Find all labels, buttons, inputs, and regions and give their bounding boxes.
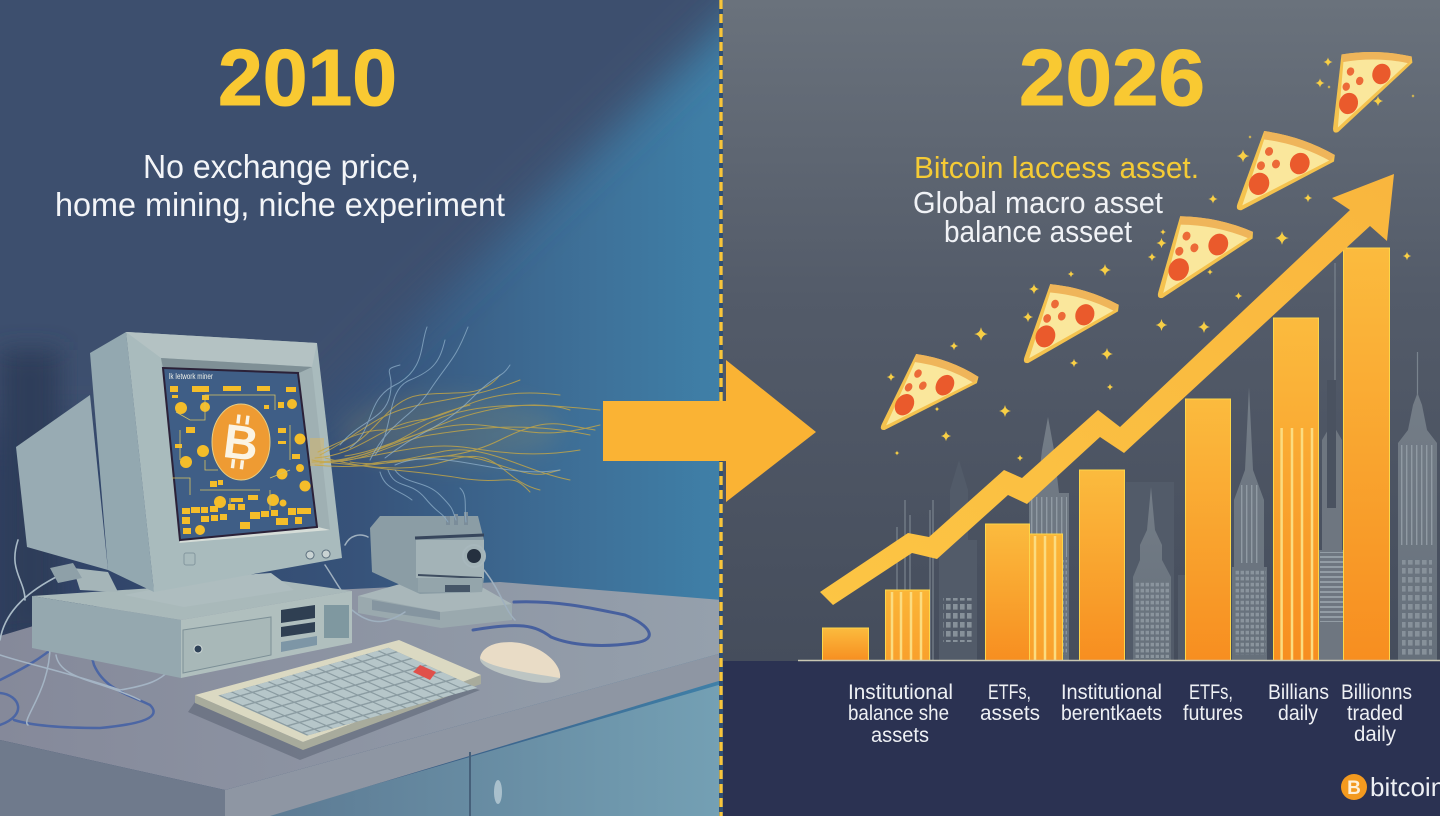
monitor back housing xyxy=(16,395,108,570)
pizza slices xyxy=(880,51,1413,452)
sparkles xyxy=(887,57,1415,461)
mouse xyxy=(480,642,560,683)
label 6: traded xyxy=(1347,702,1403,725)
pizza 2 xyxy=(1023,280,1121,383)
footer strip xyxy=(722,661,1440,816)
label 6: daily xyxy=(1354,723,1396,746)
computer xyxy=(16,332,352,678)
heading: 2010: 2010 xyxy=(218,33,397,122)
label 1: Institutional xyxy=(848,681,953,704)
text: 2026 description: balance asseet xyxy=(944,214,1132,249)
bar 3 xyxy=(986,524,1030,661)
label 4 xyxy=(1183,681,1243,725)
label 4: ETFs, xyxy=(1189,681,1233,704)
label 4: futures xyxy=(1183,702,1243,725)
pizza 1 xyxy=(880,351,981,452)
bitcoin logo: B xyxy=(1347,778,1361,799)
mining rig box xyxy=(358,512,512,628)
bar 6 xyxy=(1186,399,1230,661)
heading: 2026: 2026 xyxy=(1019,33,1205,122)
desk xyxy=(0,582,722,816)
label 1: assets xyxy=(871,724,929,747)
bar 7 xyxy=(1274,318,1318,661)
transition arrow xyxy=(603,360,816,502)
screen bitcoin coin: B xyxy=(220,415,261,472)
label 5: Billians xyxy=(1268,681,1329,704)
text: 2010 description: home mining, niche experiment xyxy=(55,186,505,223)
cables xyxy=(0,535,649,728)
wall shade upper left xyxy=(0,0,760,430)
bar 5 xyxy=(1080,470,1124,661)
pizza 5 xyxy=(1333,51,1413,135)
text: 2010 description: No exchange price, xyxy=(143,148,419,185)
monitor left bezel xyxy=(90,332,154,592)
label 5: daily xyxy=(1278,702,1318,725)
label 6: Billionns xyxy=(1341,681,1412,704)
monitor front bezel xyxy=(126,332,342,592)
screen circuit nodes xyxy=(170,386,311,535)
label 3: berentkaets xyxy=(1061,702,1162,725)
panel: 2010 home mining xyxy=(0,0,760,816)
bar 8 xyxy=(1344,248,1390,661)
screen bitcoin coin xyxy=(212,404,270,480)
bar 4 xyxy=(1030,534,1062,661)
panel: 2026 global asset xyxy=(722,0,1440,816)
label 2: ETFs, xyxy=(988,681,1031,704)
monitor stand xyxy=(50,563,294,607)
text: 2026 description: Global macro asset xyxy=(913,185,1163,220)
heat and data strands xyxy=(310,327,600,522)
pizza 4 xyxy=(1236,127,1337,234)
text: 2026 description xyxy=(913,185,1163,249)
PC base xyxy=(32,580,352,678)
label 6 xyxy=(1341,681,1412,746)
skyline xyxy=(897,263,1437,660)
monitor screen xyxy=(163,368,317,540)
keyboard xyxy=(188,640,481,760)
bar chart xyxy=(822,248,1390,661)
pizza 3 xyxy=(1157,213,1255,313)
label 1: balance she xyxy=(848,702,949,725)
label 5 xyxy=(1268,681,1329,725)
label 3: Institutional xyxy=(1061,681,1162,704)
bar 2 xyxy=(886,590,930,661)
divider xyxy=(719,0,723,816)
trend arrow xyxy=(820,174,1394,605)
text: 2026 highlight: Bitcoin laccess asset. xyxy=(914,150,1199,185)
label 2 xyxy=(980,681,1040,725)
label 3 xyxy=(1061,681,1162,725)
label 1 xyxy=(848,681,953,747)
bar labels xyxy=(848,681,1412,747)
screen title: lk Ietwork miner xyxy=(169,372,213,381)
bar 1 xyxy=(822,628,868,661)
text: 2010 description xyxy=(55,148,505,223)
label 2: assets xyxy=(980,702,1040,725)
